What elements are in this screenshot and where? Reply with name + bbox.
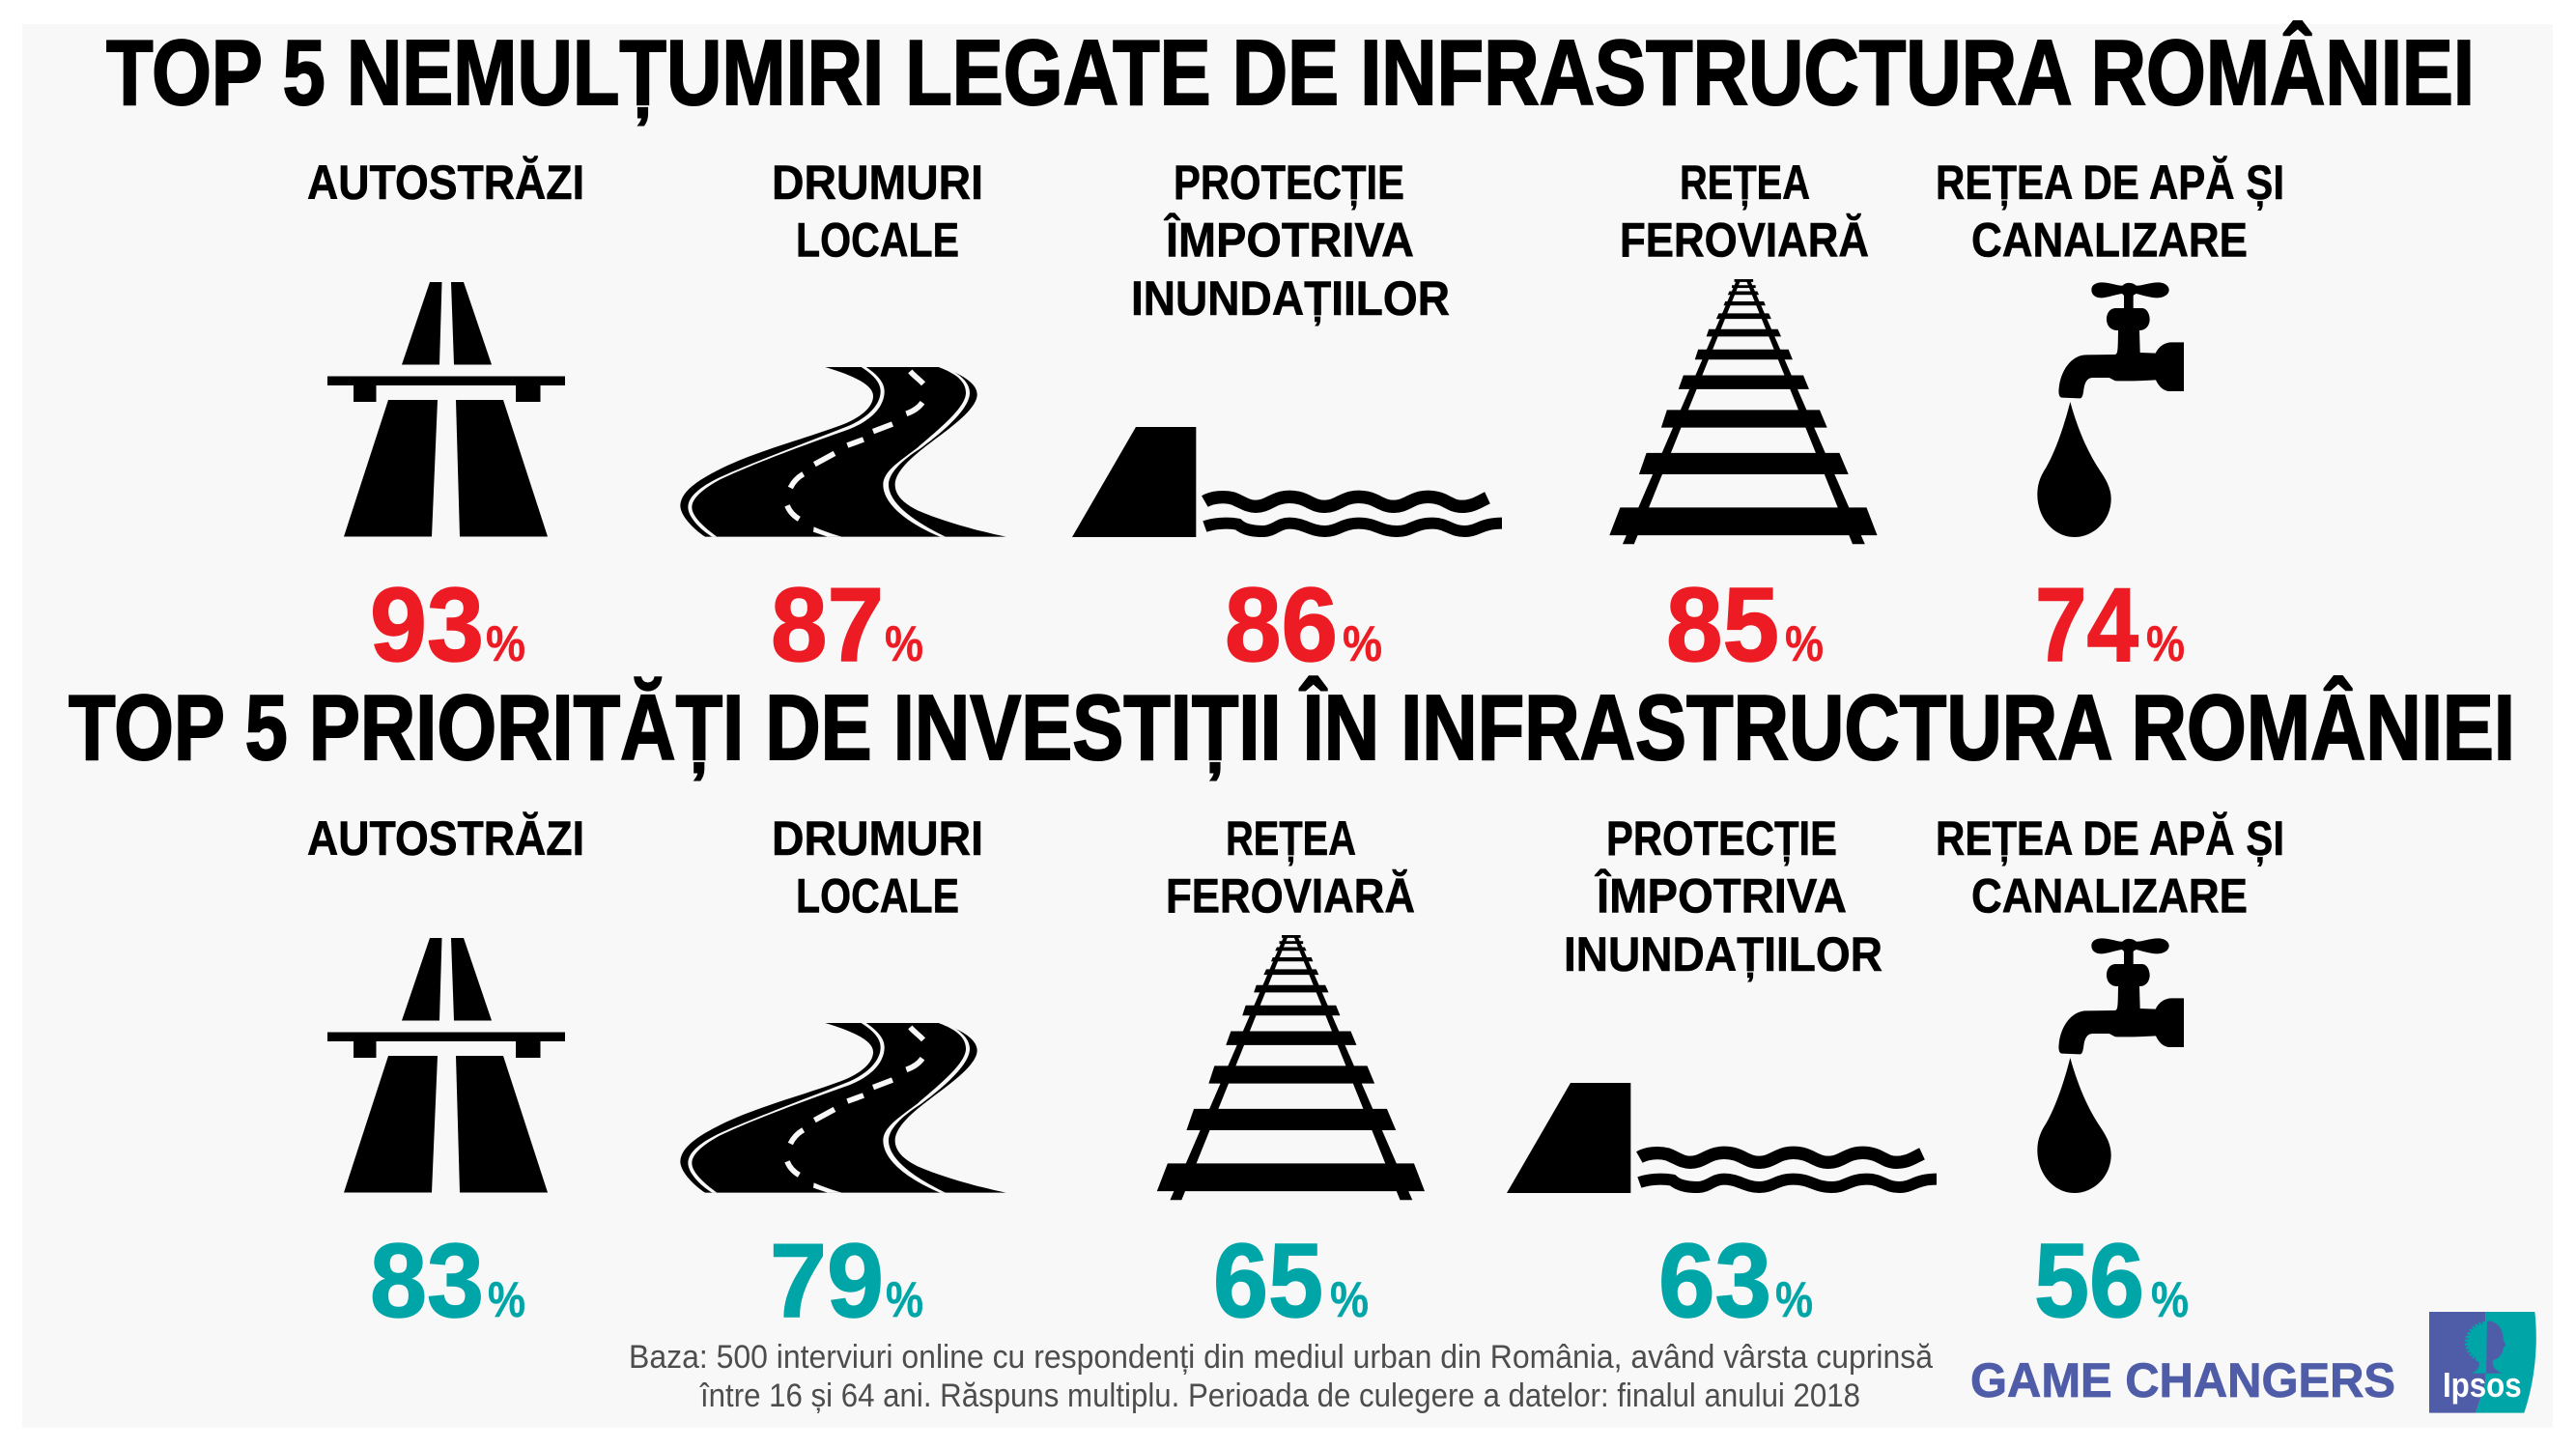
label — [772, 811, 983, 923]
label: LOCALE — [796, 213, 959, 267]
label: CANALIZARE — [1971, 213, 2248, 267]
value: 63%: % — [1775, 1272, 1813, 1328]
footnote: methodology: Baza: 500 interviuri online cu respondenți din mediul urban din România, având vârsta cuprinsă — [629, 1339, 1933, 1376]
icon: railway track — [1609, 279, 1878, 544]
logo: ipsos: Ipsos — [2443, 1365, 2522, 1405]
label: REȚEA DE APĂ ȘI — [1936, 811, 2284, 866]
icon: water tap and drop — [2037, 282, 2184, 537]
value: 56%: 56 — [2034, 1222, 2144, 1340]
label — [1564, 811, 1882, 981]
label: AUTOSTRĂZI — [307, 156, 584, 210]
label: LOCALE — [796, 869, 959, 923]
value: 74%: % — [2146, 616, 2185, 672]
footnote: methodology: între 16 și 64 ani. Răspuns multiplu. Perioada de culegere a datelor: finalul anului 2018 — [699, 1378, 1860, 1414]
column: drumuri locale — [680, 811, 1006, 1340]
icon: highway — [327, 938, 565, 1192]
value: 65%: % — [1330, 1272, 1369, 1328]
label: PROTECȚIE — [1606, 811, 1837, 866]
column: rețea de apă și canalizare — [1936, 811, 2284, 1340]
label: DRUMURI — [772, 811, 983, 866]
label: CANALIZARE — [1971, 869, 2248, 923]
label: AUTOSTRĂZI — [307, 811, 584, 866]
column: rețea feroviară — [1157, 811, 1425, 1340]
column: rețea de apă și canalizare — [1936, 156, 2284, 684]
value: 93%: % — [486, 616, 525, 672]
icon: highway — [327, 282, 565, 537]
label: REȚEA — [1680, 156, 1810, 210]
panel: top 5 complaints — [106, 20, 2475, 684]
value: 85%: % — [1785, 616, 1824, 672]
value: 86%: 86 — [1225, 566, 1338, 684]
icon: dam and water — [1507, 1083, 1937, 1193]
label — [772, 156, 983, 267]
icon: winding road — [680, 1023, 1006, 1193]
value: 87%: 87 — [771, 566, 884, 684]
value: 83%: 83 — [370, 1222, 484, 1340]
icon: winding road — [680, 367, 1006, 537]
label — [1131, 156, 1450, 326]
label: FEROVIARĂ — [1166, 869, 1415, 923]
value: 65%: 65 — [1213, 1222, 1323, 1340]
column: drumuri locale — [680, 156, 1006, 684]
logo: ipsos — [2429, 1312, 2536, 1413]
column: rețea feroviară — [1609, 156, 1878, 684]
icon: water tap and drop — [2037, 938, 2184, 1193]
column: autostrăzi — [307, 811, 584, 1340]
panel: top 5 investment priorities — [69, 675, 2515, 1340]
label — [1166, 811, 1415, 923]
footnote: methodology — [629, 1339, 1933, 1414]
value: 83%: % — [488, 1272, 525, 1328]
label — [1936, 811, 2284, 923]
value: 63%: 63 — [1658, 1222, 1771, 1340]
column: protecție împotriva inundațiilor — [1072, 156, 1502, 684]
value: 56%: % — [2151, 1272, 2189, 1328]
label: PROTECȚIE — [1174, 156, 1404, 210]
label: ÎMPOTRIVA — [1594, 869, 1847, 923]
label — [1620, 156, 1869, 267]
label: ÎMPOTRIVA — [1163, 213, 1414, 267]
label: FEROVIARĂ — [1620, 213, 1869, 267]
icon: railway track — [1157, 935, 1425, 1200]
value: 87%: % — [885, 616, 923, 672]
label: INUNDAȚIILOR — [1564, 927, 1882, 981]
label: REȚEA DE APĂ ȘI — [1936, 156, 2284, 210]
column: autostrăzi — [307, 156, 584, 684]
label — [1936, 156, 2284, 267]
value: 86%: % — [1343, 616, 1382, 672]
value: 79%: 79 — [770, 1222, 884, 1340]
label: DRUMURI — [772, 156, 983, 210]
brand text: game changers: GAME CHANGERS — [1970, 1353, 2395, 1407]
column: protecție împotriva inundațiilor — [1507, 811, 1937, 1340]
icon: dam and water — [1072, 427, 1502, 537]
label: REȚEA — [1226, 811, 1356, 866]
label: INUNDAȚIILOR — [1131, 271, 1450, 326]
value: 93%: 93 — [370, 566, 484, 684]
value: 79%: % — [886, 1272, 923, 1328]
value: 74%: 74 — [2035, 566, 2138, 684]
value: 85%: 85 — [1666, 566, 1779, 684]
